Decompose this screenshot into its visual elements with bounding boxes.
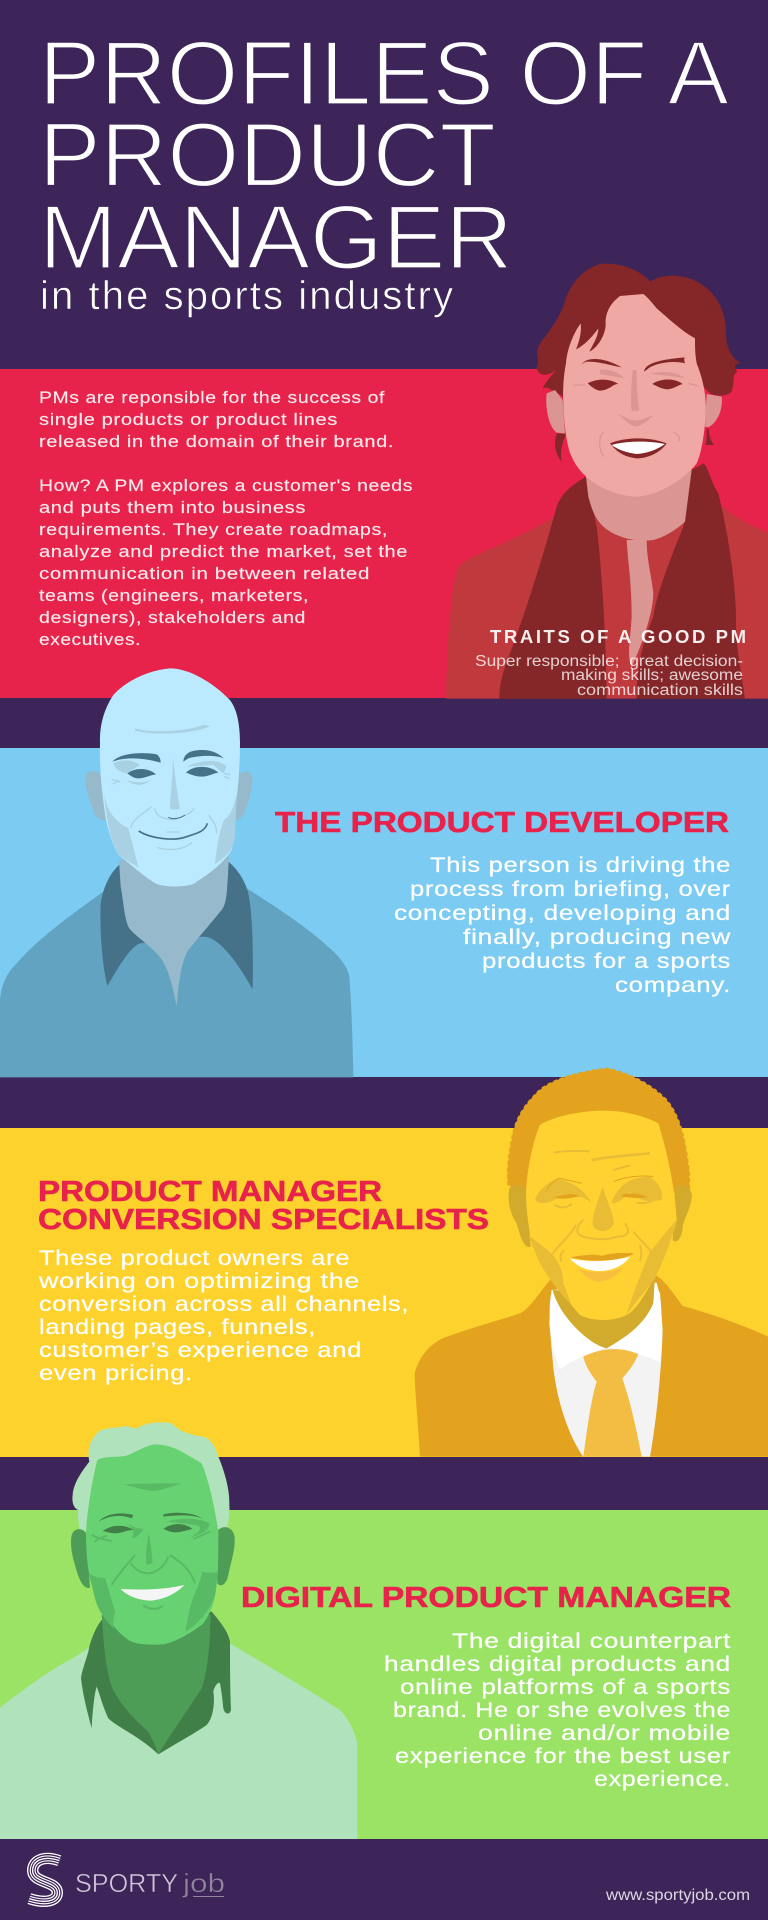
logo: SPORTYjob <box>29 1858 225 1901</box>
website url: www.sportyjob.com <box>605 1887 750 1904</box>
text block: product developer description <box>394 853 731 997</box>
text block: conversion specialists description: working on optimizing the <box>38 1269 360 1293</box>
callout: traits of a good PM: TRAITS OF A GOOD PM <box>490 626 746 647</box>
heading: product manager conversion specialists: CONVERSION SPECIALISTS <box>38 1204 489 1236</box>
title: PRODUCT <box>39 105 496 206</box>
text block: product manager intro: communication in between related <box>39 565 370 583</box>
text block: conversion specialists description: conversion across all channels, <box>39 1292 409 1316</box>
panel: red intro band <box>0 369 768 698</box>
text block: product developer description: process from briefing, over <box>410 877 731 901</box>
illustration: smiling man in yellow suit and tie <box>415 1068 768 1457</box>
title <box>39 24 729 288</box>
heading: digital product manager: DIGITAL PRODUCT MANAGER <box>241 1582 731 1614</box>
text block: conversion specialists description: customer’s experience and <box>39 1338 362 1362</box>
callout: traits of a good PM: making skills; awesome <box>561 667 743 684</box>
text block: digital product manager description: online platforms of a sports <box>400 1675 731 1699</box>
text block: conversion specialists description: even pricing. <box>39 1361 193 1385</box>
text block: product manager intro: and puts them into business <box>39 499 306 517</box>
logo: SPORTYjob: job <box>182 1868 225 1898</box>
text block: product developer description: finally, producing new <box>463 925 731 949</box>
text block: product manager intro: How? A PM explores a customer's needs <box>39 477 413 495</box>
text block: product developer description: company. <box>615 973 731 997</box>
panel: green digital product manager band <box>0 1510 768 1839</box>
text block: digital product manager description <box>384 1629 731 1791</box>
text block: product developer description: This person is driving the <box>430 853 731 877</box>
title: PROFILES OF A <box>39 24 729 124</box>
facial features <box>528 1151 676 1315</box>
illustration: woman with dark red hair and scarf <box>446 264 768 699</box>
callout: traits of a good PM: Super responsible; great decision- <box>475 653 743 670</box>
heading: the product developer: THE PRODUCT DEVELOPER <box>275 807 729 839</box>
text block: product developer description: products for a sports <box>482 949 731 973</box>
panel: yellow conversion specialists band <box>0 1128 768 1457</box>
text block: product manager intro: analyze and predict the market, set the <box>39 543 408 561</box>
facial features <box>104 725 237 867</box>
text block: product manager intro: executives. <box>39 631 141 649</box>
text block: digital product manager description: experience. <box>594 1767 731 1791</box>
text block: product manager intro: requirements. They create roadmaps, <box>39 521 388 539</box>
panel: blue product developer band <box>0 748 768 1077</box>
text block: digital product manager description: handles digital products and <box>384 1652 731 1676</box>
callout: traits of a good PM <box>475 626 746 699</box>
text block: product manager intro: released in the domain of their brand. <box>39 433 394 451</box>
text block: product manager intro: PMs are reponsible for the success of <box>39 389 385 407</box>
facial features <box>88 1483 218 1632</box>
text block: conversion specialists description: These product owners are <box>39 1246 350 1270</box>
text block: product manager intro: teams (engineers, marketers, <box>39 587 309 605</box>
text block: product manager intro <box>39 389 413 649</box>
wordmark: SPORTY <box>75 1868 178 1898</box>
illustration: grey-haired man in green <box>0 1422 357 1839</box>
heading: product manager conversion specialists <box>38 1176 489 1236</box>
text block: conversion specialists description: landing pages, funnels, <box>39 1315 316 1339</box>
text block: conversion specialists description <box>38 1246 409 1385</box>
text block: digital product manager description: The digital counterpart <box>452 1629 731 1653</box>
icon: striped S mark <box>29 1858 59 1901</box>
heading: product manager conversion specialists: PRODUCT MANAGER <box>38 1176 382 1208</box>
text block: product manager intro: single products or product lines <box>39 411 338 429</box>
subtitle: in the sports industry <box>40 274 453 318</box>
text block: digital product manager description: experience for the best user <box>395 1744 731 1768</box>
facial features <box>573 357 698 458</box>
text block: product manager intro: designers), stakeholders and <box>39 609 306 627</box>
text block: digital product manager description: online and/or mobile <box>478 1721 731 1745</box>
illustration: bald man in blue shirt <box>0 668 353 1077</box>
text block: digital product manager description: brand. He or she evolves the <box>393 1698 731 1722</box>
callout: traits of a good PM: communication skills <box>577 682 743 699</box>
title: MANAGER <box>39 188 513 288</box>
text block: product developer description: concepting, developing and <box>394 901 731 925</box>
